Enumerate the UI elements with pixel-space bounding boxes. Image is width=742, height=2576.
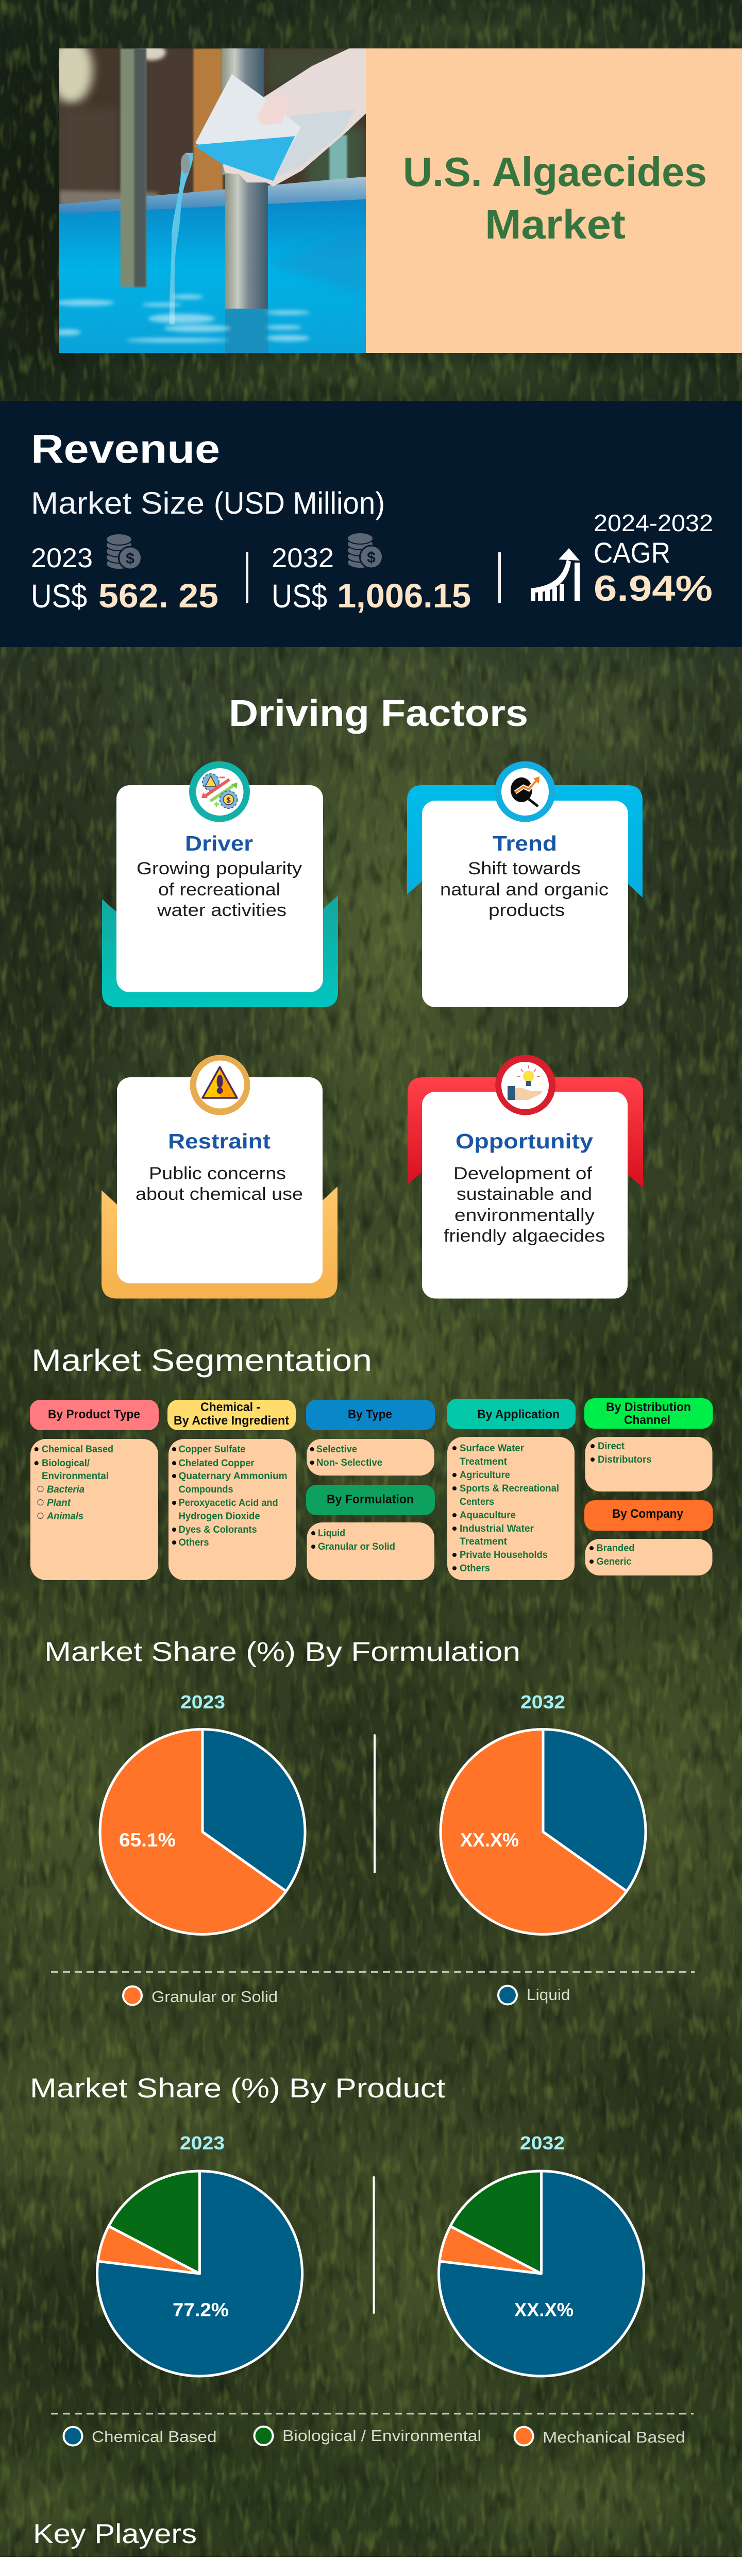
panel: by active ingredient: Compounds [179,1484,233,1495]
panel: by product type: By Product Type [48,1408,140,1421]
panel: by product type: Biological/ [42,1458,90,1469]
panel: by company: Generic [597,1556,632,1567]
legend: formulation: Granular or Solid [151,1988,278,2006]
panel: by application [447,1399,576,1580]
icon: driver: $ [226,796,231,805]
panel: by distribution channel [584,1398,713,1492]
panel: by company [584,1500,713,1575]
panel: by active ingredient: Quaternary Ammonium [179,1471,288,1482]
stat 2023 [31,543,218,615]
opportunity text: Development of [453,1164,593,1183]
icon: restraint [190,1055,250,1115]
title: U.S. Algaecides [403,149,707,195]
restraint text [136,1164,303,1204]
legend: product [51,2414,694,2446]
divider [374,1734,376,1873]
heading: market share by formulation: Market Share (%) By Formulation [44,1637,520,1667]
glove [223,48,366,187]
restraint text: about chemical use [136,1184,303,1204]
panel: trend [407,761,643,1007]
stat: CAGR: 6.94% [594,568,713,608]
icon: opportunity [495,1055,555,1115]
chart: product 2023: 77.2% [173,2299,229,2320]
panel: by type: Selective [316,1444,357,1455]
panel: by active ingredient: Hydrogen Dioxide [179,1511,260,1522]
panel: by active ingredient: By Active Ingredient [174,1414,289,1428]
chart: formulation 2023: 2023 [180,1691,225,1713]
panel: by active ingredient: Chemical - [200,1400,260,1414]
icon: coins 2023: $ [126,550,134,567]
panel: by product type: Chemical Based [42,1444,113,1455]
stream [170,153,193,325]
panel: by application: Industrial Water [460,1523,534,1534]
title panel [366,48,742,353]
icon: coins 2032 [347,533,382,568]
chart: product 2032: 2032 [520,2132,565,2154]
panel: by application: Sports & Recreational [460,1483,559,1494]
driver text: Growing popularity [137,859,302,878]
restraint text: Public concerns [149,1164,286,1183]
cup [195,74,301,180]
icon: trend [495,761,555,822]
stat 2032 [272,543,471,615]
panel: by type: By Type [348,1408,392,1421]
trend title: Trend [493,832,557,855]
panel: by distribution channel: Channel [624,1413,670,1427]
panel: by formulation: Granular or Solid [318,1541,395,1552]
panel: driver [102,761,338,1007]
panel: by application: Treatment [460,1456,508,1467]
panel: opportunity [408,1055,643,1298]
chart: product 2032 [439,2132,644,2376]
divider [246,552,248,603]
panel: by product type: Bacteria [47,1484,85,1495]
panel: by product type: Animals [46,1511,83,1522]
icon: coins 2023 [106,534,141,569]
opportunity text [444,1164,605,1246]
divider [498,552,501,603]
legend: product: Chemical Based [92,2428,216,2446]
panel: by type [306,1400,435,1476]
panel: by application: Agriculture [460,1470,510,1481]
heading: market segmentation: Market Segmentation [31,1343,372,1378]
chart: formulation 2032: 2032 [520,1691,565,1713]
panel: by formulation: By Formulation [327,1493,414,1506]
legend: formulation [51,1972,695,2006]
panel: by application: Centers [460,1497,494,1507]
liquid [193,136,295,181]
market size label: Market Size [31,486,205,520]
legend: product: Mechanical Based [543,2428,685,2446]
panel: by active ingredient: Chelated Copper [179,1458,255,1469]
chart: product 2023 [97,2132,302,2376]
panel: by application: Others [460,1563,490,1574]
panel: by distribution channel: Distributors [598,1454,651,1465]
stat 2032: US$ [272,578,327,615]
ripples [54,295,310,343]
title [403,149,707,247]
panel: by formulation [306,1485,435,1580]
opportunity text: friendly algaecides [444,1226,605,1246]
trend text: products [488,901,565,920]
panel: by type: Non- Selective [316,1458,382,1468]
stat: CAGR [594,510,713,608]
panel: by distribution channel: By Distribution [606,1400,691,1414]
driver text: of recreational [158,880,280,900]
stat: CAGR: 2024-2032 [594,510,713,536]
heading: driving factors: Driving Factors [229,693,528,734]
panel: by product type: Environmental [42,1471,109,1482]
legend: product: Biological / Environmental [282,2427,481,2445]
trend text [440,859,609,920]
panel: by application: By Application [477,1408,560,1421]
panel: by company: Branded [597,1543,635,1554]
hero panel [49,37,742,353]
panel: by company: By Company [612,1507,684,1521]
panel: revenue [0,401,742,647]
driver text: water activities [157,901,286,920]
chart: formulation 2032 [441,1691,646,1934]
panel: by active ingredient: Peroxyacetic Acid and [179,1498,278,1509]
opportunity text: sustainable and [457,1184,592,1204]
stat 2023: US$ [31,578,87,615]
chart: product 2032: XX.X% [514,2299,574,2320]
trend text: Shift towards [468,859,581,878]
hero photo: chemical poured into pool [49,37,366,353]
panel: by distribution channel: Direct [598,1441,625,1452]
market size label [31,486,385,520]
restraint title: Restraint [168,1129,271,1153]
stat 2023: 2023 [31,543,93,573]
driver title: Driver [185,832,253,855]
panel: by formulation: Liquid [318,1528,345,1539]
divider [373,2176,375,2314]
chart: formulation 2023: 65.1% [119,1829,176,1851]
legend: formulation: Liquid [527,1986,570,2004]
panel: by application: Treatment [460,1536,508,1547]
icon: coins 2032: $ [367,549,376,566]
stat: CAGR: CAGR [594,536,670,569]
heading: key players: Key Players [33,2519,197,2549]
panel: restraint [102,1055,338,1298]
icon: driver [189,761,250,822]
stat 2032: 2032 [272,543,334,573]
panel: by active ingredient: Dyes & Colorants [179,1524,257,1535]
opportunity text: environmentally [454,1206,595,1225]
heading: revenue: Revenue [31,426,220,471]
stat 2023: 562. 25 [98,577,218,615]
driver text [137,859,302,920]
panel: key players logos [0,2557,742,2576]
panel: by application: Aquaculture [460,1510,516,1521]
chart: product 2023: 2023 [180,2132,225,2154]
panel: by active ingredient [167,1400,296,1580]
panel: by active ingredient: Copper Sulfate [179,1444,246,1455]
panel: by application: Surface Water [460,1443,525,1454]
heading: market share by product: Market Share (%) By Product [30,2073,445,2104]
market size label: (USD Million) [214,486,385,520]
stat 2032: 1,006.15 [337,577,471,615]
trend text: natural and organic [440,880,609,900]
panel: by application: Private Households [460,1550,548,1561]
panel: by active ingredient: Others [179,1537,209,1548]
title: Market [485,201,626,247]
opportunity title: Opportunity [456,1129,593,1153]
chart: formulation 2023 [100,1691,305,1934]
panel: by product type [30,1400,159,1580]
panel: by product type: Plant [47,1498,71,1509]
chart: formulation 2032: XX.X% [460,1829,519,1851]
icon: growth chart [531,548,580,601]
